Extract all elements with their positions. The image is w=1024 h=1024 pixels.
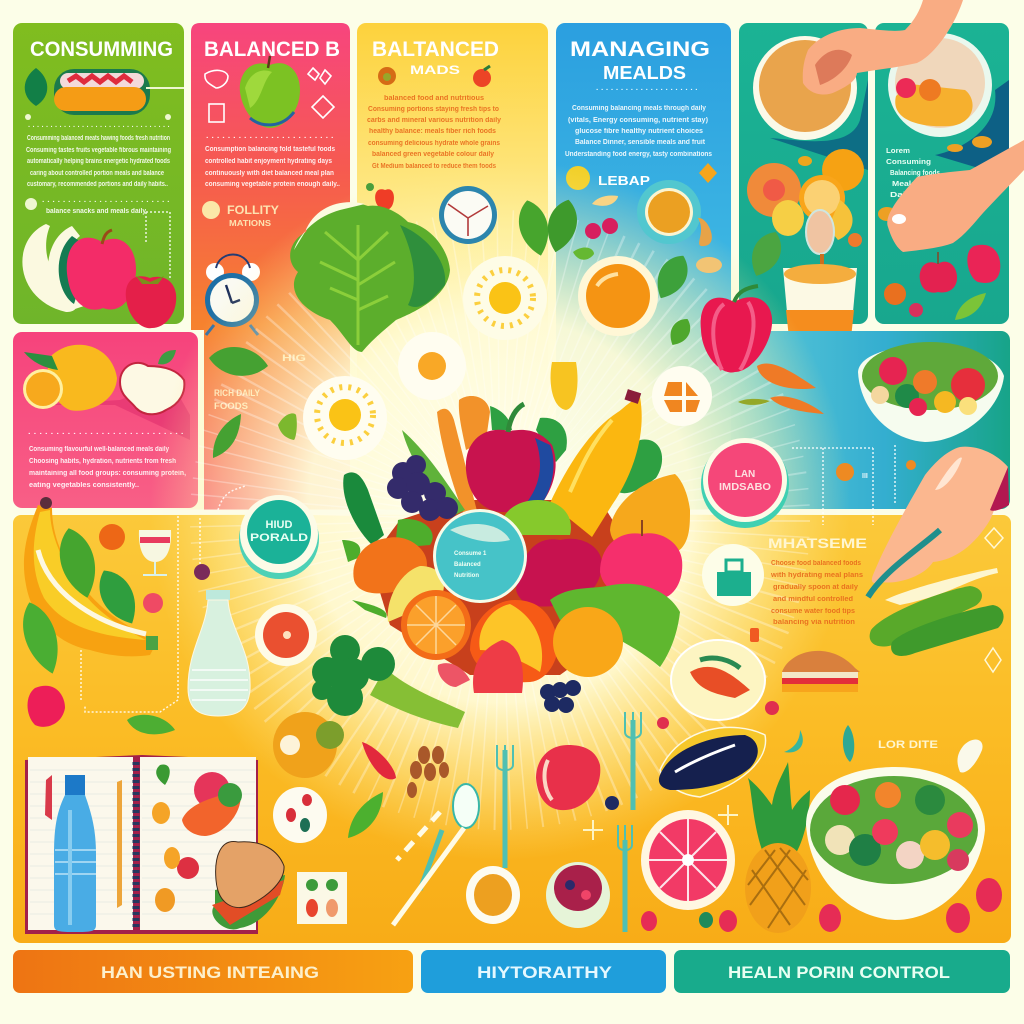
icon: teal circle [239,495,319,579]
leaves behind [490,406,662,493]
text: managing body [565,87,712,158]
cucumber [343,472,384,545]
text: right note: with hydrating meal plans [770,572,863,579]
text: pink body: · · · · · · · · · · · · · · · · · · · · · · · · · · · · [28,431,184,438]
panel shadow [770,80,868,170]
icon: pink circle: LAN [735,469,755,480]
globe: Nutrition [454,573,479,579]
panel: teal bowls [739,23,868,345]
text: food notes: RICH DAILY [214,388,260,398]
text: right note: Choose food balanced foods [771,560,861,567]
icon: pink apple [67,230,136,310]
icon: coin [566,166,590,190]
icon: upper hand [803,0,963,95]
icon: broccoli [312,635,465,728]
text: right note: balancing via nutrition [773,619,855,626]
icon: water bottle blue [54,775,96,932]
icon: spoon pour [806,210,834,280]
text: small lines: Balancing foods [890,170,940,177]
icon: red apple tall [536,745,619,810]
subheading: meals: MEALDS [603,63,686,83]
icon: herb [843,725,983,773]
icon: food card [297,872,347,924]
text: food notes: FOODS [214,401,248,411]
globe: Consume 1 [454,551,487,557]
shadow [935,80,1009,170]
lettuce right [550,584,680,667]
text: balanced body: · · · · · · · · · · · · · · · · · · · · · · · · [206,135,334,142]
icons: raspberries [641,878,1002,933]
icon: small orange [884,283,923,317]
icon: plate [671,640,765,720]
heading: balanced b: BALANCED B [204,38,340,61]
icon: grapefruit [641,810,735,910]
icon: notebook [25,755,258,934]
icon: green bag [702,544,764,606]
pear [610,474,690,556]
icon: citrus cluster [747,149,864,247]
text: small lines: Lorem [886,148,910,155]
icon: sun circle large [463,256,547,340]
icon: eggplant [659,727,766,797]
green shoots [402,430,465,515]
label: poultry: MATIONS [229,219,272,228]
icon: lettuce [290,202,450,352]
central fruit pile [342,389,690,713]
text: right note [768,535,867,626]
icon: diamonds [985,528,1003,672]
label: low note: LOR DITE [878,739,938,751]
icon: sandwich [212,841,285,929]
icon: lemon [23,345,117,411]
icon: coconut [22,224,84,312]
text: food notes: HIG [282,353,306,363]
icon: orange star [699,163,717,183]
panel: baltanced meals [357,23,548,510]
text: consuming body: caring about controlled portion meals and balance [30,170,164,177]
pink apple [600,520,682,600]
text: food notes [214,353,306,411]
icon: rice bowl [888,33,992,137]
banana [550,397,642,537]
text: baltanced body: consuming delicious hydrate whole grains [368,140,500,147]
text: small lines: Daily [890,192,914,199]
icons: banana leaves [15,524,146,678]
decorative rays [320,340,680,700]
text: consuming body: · · · · · · · · · · · · · · · · · · · · · · · · · · · · · · · · [28,124,170,131]
icon: lower right hand [887,140,1024,252]
footer: blue bar: HIYTORAITHY [477,963,613,982]
panel shadow [35,380,190,440]
text: consuming body [26,124,171,215]
icon: orange [578,256,658,336]
icon: pink circle [701,438,789,528]
icon: red berry [657,628,779,729]
icon: leaf badge [25,68,47,106]
footer: teal bar: HEALN PORIN CONTROL [728,963,950,982]
icon: white apple [120,350,184,414]
icon: banana [24,497,158,656]
icon: red pepper [701,286,772,373]
icon: leaf small [665,315,695,349]
icon: pink fruit [967,245,1000,283]
text: baltanced body: balanced green vegetable colour daily [372,151,494,158]
icon: dashed diagram: III [862,473,868,480]
hands top [803,0,1024,252]
text: consuming body: automatically helping brains energetic hydrated foods [27,158,170,165]
text: small lines [886,148,940,199]
icon: pepper and nuts [362,742,449,798]
text: managing body: Balance Dinner, sensible meals and fruit [575,139,706,146]
icon: grapefruit circle [255,604,317,666]
text: right note: consume water food tips [771,608,855,615]
icon: teal circle: HIUD [266,519,292,531]
icon: grain bowl [753,36,857,140]
icon: salad bowl bottom [806,767,985,920]
text: small lines: Meals [892,181,916,188]
icon: poultry badge [202,201,220,219]
icons: food sketches [152,765,242,912]
icon: green leaf [955,293,986,320]
icon: small leaf [127,715,175,734]
label: poultry: FOLLITY [227,203,279,217]
icon: water bottle [188,590,250,716]
green apple [500,500,571,535]
text: pink body [28,431,186,489]
panel: balanced B [191,23,350,510]
orange fruit left [353,537,427,593]
icon: utensils [393,712,641,932]
icon: egg circle [398,332,466,400]
panel: consuming [13,23,184,328]
globe: Balanced [454,562,481,568]
icon: leaf [649,250,695,304]
text: small lines: Consuming [886,159,931,166]
text: managing body: Understanding food energy, tasty combinations [565,151,712,158]
carrots [437,396,490,520]
text: managing body: glucose fibre healthy nutrient choices [575,128,703,135]
icon: teal spoon [784,730,803,753]
text: consuming body: balance snacks and meals daily [46,208,146,215]
icon: white plate [273,787,327,843]
red apple [466,404,556,512]
footer: orange bar: HAN USTING INTEAING [101,963,319,982]
icon: sausage pill [54,69,184,115]
text: consuming body: customary, recommended portions and daily habits.. [27,181,168,188]
icon: green apple [240,56,300,128]
text: baltanced body: balanced food and nutritious [384,95,484,102]
subheading: mads: MADS [410,63,460,77]
icon: pink circle: IMDSABO [719,482,771,493]
icon: sandwich stack [782,651,860,692]
text: balanced body: controlled habit enjoyment hydrating days [205,158,332,165]
icon: sparkles [583,805,738,840]
footer: orange bar [13,950,413,993]
yellow peach [470,600,558,682]
icons: white outline doodles [205,68,334,122]
icon: pie circle [652,366,712,426]
orange fruit [553,607,623,677]
text: baltanced body: carbs and mineral various nutrition daily [367,117,501,124]
central glow [150,160,850,860]
icons: items over panels [366,180,722,336]
footer: blue bar [421,950,666,993]
text: baltanced body: healthy balance: meals fiber rich foods [369,128,496,135]
icon: grain bowl [637,180,701,244]
text: right note: and mindful controlled [773,596,853,603]
text: managing body: · · · · · · · · · · · · · · · · · · · · · [596,87,698,94]
text: managing body: (vitals, Energy consuming, nutrient stay) [568,117,708,124]
icon: leaf [348,792,383,838]
icon: small apple [366,183,394,210]
icon: sun circle left [303,376,387,460]
heading: baltanced: BALTANCED [372,38,499,61]
icon: small red apple [28,686,65,727]
icon: cucumbers [870,568,1004,656]
icons: nuts [878,136,992,221]
icon: small dots [25,114,171,210]
icon: orange grain plate [466,866,520,924]
text: pink body: maintaining all food groups: consuming protein, [29,470,186,477]
icon: pineapple [745,762,811,933]
panel: right wash [731,331,1010,509]
text: right note: gradually spoon at daily [773,584,858,591]
icon: juice cup [783,264,857,345]
text: balanced body: Consumption balancing fold tasteful foods [205,146,335,153]
text: managing body: Consuming balancing meals through daily [572,105,706,112]
icon: red apple [920,252,957,293]
icon: yellow pod [551,362,578,410]
label: poultry [227,203,279,228]
text: balanced body: continuously with diet balanced meal plan [205,170,334,177]
white gutter lines [13,510,1010,514]
icon: dashed lines [81,486,245,712]
text: pink body: Consuming flavourful well-balanced meals daily [29,446,169,453]
heading: managing: MANAGING [570,38,710,61]
icon: dashed diagram [792,445,916,525]
globe [433,509,527,603]
panel: right bowls [875,23,1009,324]
text: consuming body: Consuming tastes fruits vegetable fibrous maintaining [26,147,171,154]
cut orange [401,590,471,660]
strawberry [473,640,523,693]
icon: hand lower right [868,447,1009,597]
icons: nuts and cherries [573,195,722,273]
icon: red strawberry [126,276,176,328]
text: baltanced body: Consuming portions staying fresh tips to [368,106,499,113]
lemon slice [388,566,444,622]
icon: wall clock [439,186,497,244]
icon: mint leaves [513,196,582,259]
panel: bottom yellow field [13,515,1011,943]
text: baltanced body: Gt Medium balanced to reduce them foods [372,163,496,170]
panel: left pink [13,332,198,508]
icon: berry bowl [546,862,610,928]
berries [540,680,581,713]
footer: teal bar [674,950,1010,993]
icon: carrots [738,363,824,414]
icons: leaves on pink panel [209,347,297,458]
text: baltanced body [367,95,501,170]
leaf greens [342,519,433,618]
icon: alarm clock [205,254,260,335]
text: balanced body: consuming vegetable protein enough daily.. [205,181,340,188]
icons: small fruits [378,66,491,87]
heading: consuming: CONSUMMING [30,38,173,61]
panel: managing meals [556,23,731,510]
icon: teal leaf [744,227,788,281]
text: right note: MHATSEME [768,535,867,551]
icon: salad bowl top [858,342,1004,442]
pile base [370,500,650,675]
text: pink body: Choosing habits, hydration, nutrients from fresh [29,458,176,465]
magenta apple [516,539,602,607]
text: pink body: eating vegetables consistently.. [29,482,139,489]
grapes [387,455,458,521]
icon: teal circle: PORALD [250,532,308,544]
text: balanced body [205,135,340,188]
icon: orange ball [273,712,344,778]
icons: small glass and fruit [99,524,171,613]
text: consuming body: · · · · · · · · · · · · · · · · · · · · · · · · · [42,199,170,206]
text: consuming body: Consumming balanced meats hawing foods fresh nutrition [27,135,170,142]
label: leap: LEBAP [598,173,650,188]
